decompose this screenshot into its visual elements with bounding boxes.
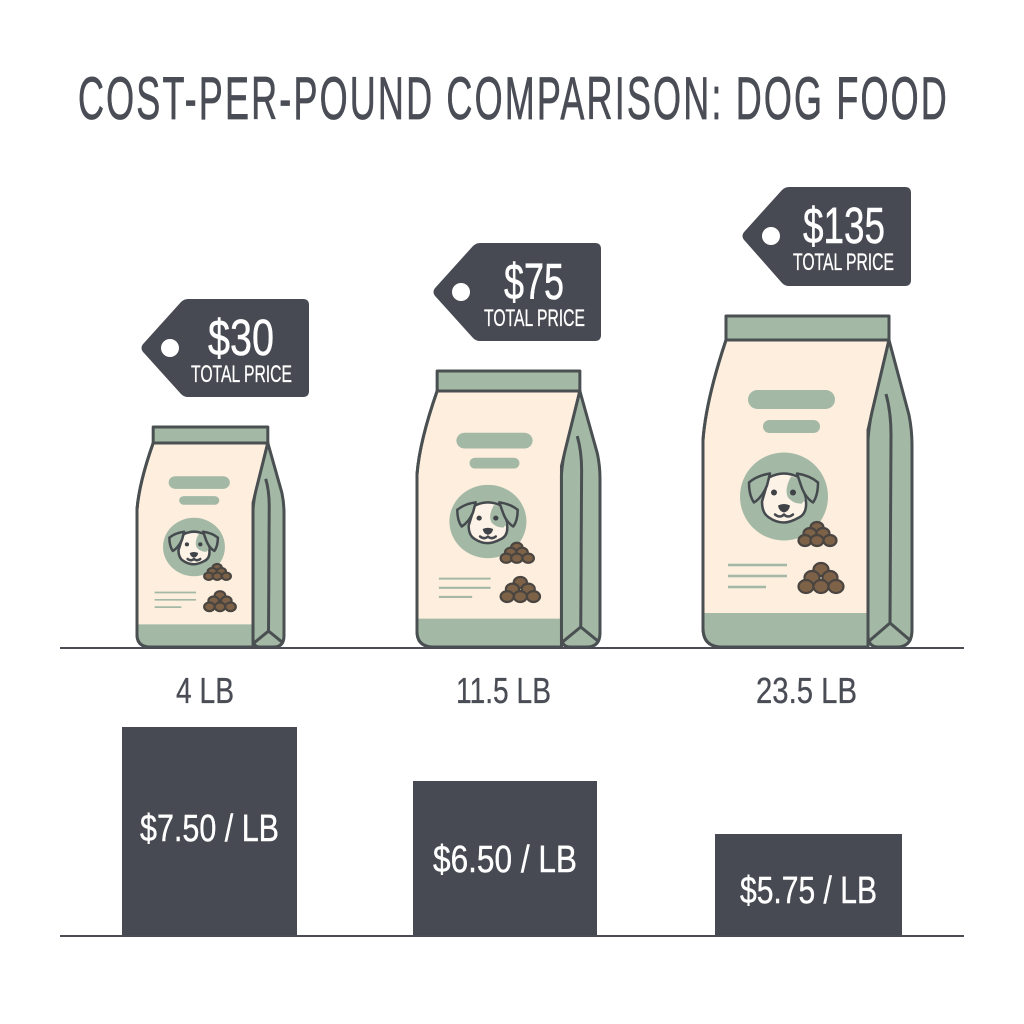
bar: $5.75 per lb: $5.75 / LB — [740, 870, 877, 912]
weight label: 23.5 LB: 23.5 LB — [756, 670, 857, 711]
bar: $6.50 per lb — [413, 781, 597, 936]
bar: $7.50 per lb — [122, 727, 297, 936]
price tag: $30: $30 — [208, 309, 274, 366]
bar: $5.75 per lb — [715, 834, 902, 936]
price tag: $135: TOTAL PRICE — [793, 249, 894, 276]
dog food bag: small — [137, 427, 284, 647]
price tag: $75: $75 — [504, 253, 564, 310]
price tag: $30: TOTAL PRICE — [191, 361, 292, 388]
icon: kibble piles — [204, 564, 236, 611]
bar: $6.50 per lb: $6.50 / LB — [433, 839, 577, 881]
price tag: $135: $135 — [803, 197, 885, 254]
price tag: $75 — [434, 243, 601, 341]
price tag: $135 — [742, 187, 911, 286]
dog food bag: medium — [417, 371, 600, 647]
icon: dog face — [163, 518, 225, 576]
icon: dog face — [740, 452, 828, 540]
bar: $7.50 per lb: $7.50 / LB — [140, 808, 279, 850]
bag body — [137, 427, 284, 647]
icon: dog face — [449, 485, 526, 558]
shelf line — [60, 647, 964, 649]
bag body — [417, 371, 600, 647]
bag body — [703, 316, 912, 647]
weight label: 11.5 LB: 11.5 LB — [456, 670, 551, 711]
price tag: $30 — [142, 299, 309, 397]
baseline — [60, 935, 964, 937]
title: COST-PER-POUND COMPARISON: DOG FOOD — [78, 66, 947, 132]
weight label: 4 LB: 4 LB — [176, 670, 234, 711]
icon: kibble piles — [798, 522, 844, 593]
dog food bag: large — [703, 316, 912, 647]
price tag: $75: TOTAL PRICE — [484, 305, 585, 332]
icon: kibble piles — [501, 543, 540, 602]
